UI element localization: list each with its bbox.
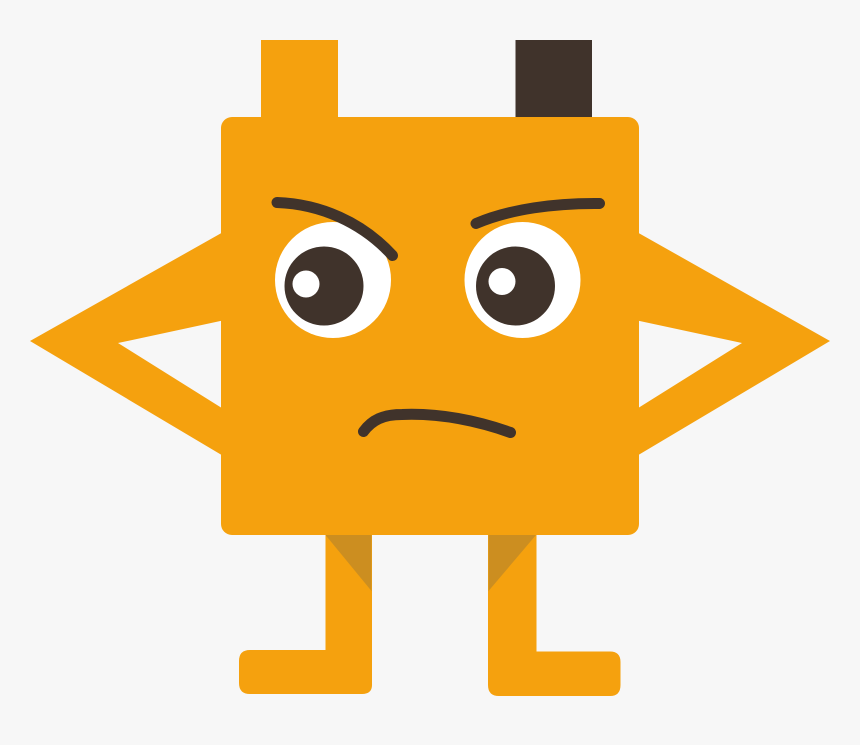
frowning mouth <box>364 414 510 432</box>
right leg <box>488 530 620 696</box>
right eyebrow <box>476 203 600 224</box>
right horn <box>516 40 592 130</box>
right arm <box>635 231 830 457</box>
left eyebrow <box>277 202 392 256</box>
left horn <box>261 40 338 130</box>
body <box>221 117 639 535</box>
right leg shadow <box>488 535 536 591</box>
left leg shadow <box>326 535 372 591</box>
left arm <box>30 231 225 457</box>
right eye <box>464 222 580 338</box>
left leg <box>239 530 372 694</box>
left eye <box>275 222 391 338</box>
